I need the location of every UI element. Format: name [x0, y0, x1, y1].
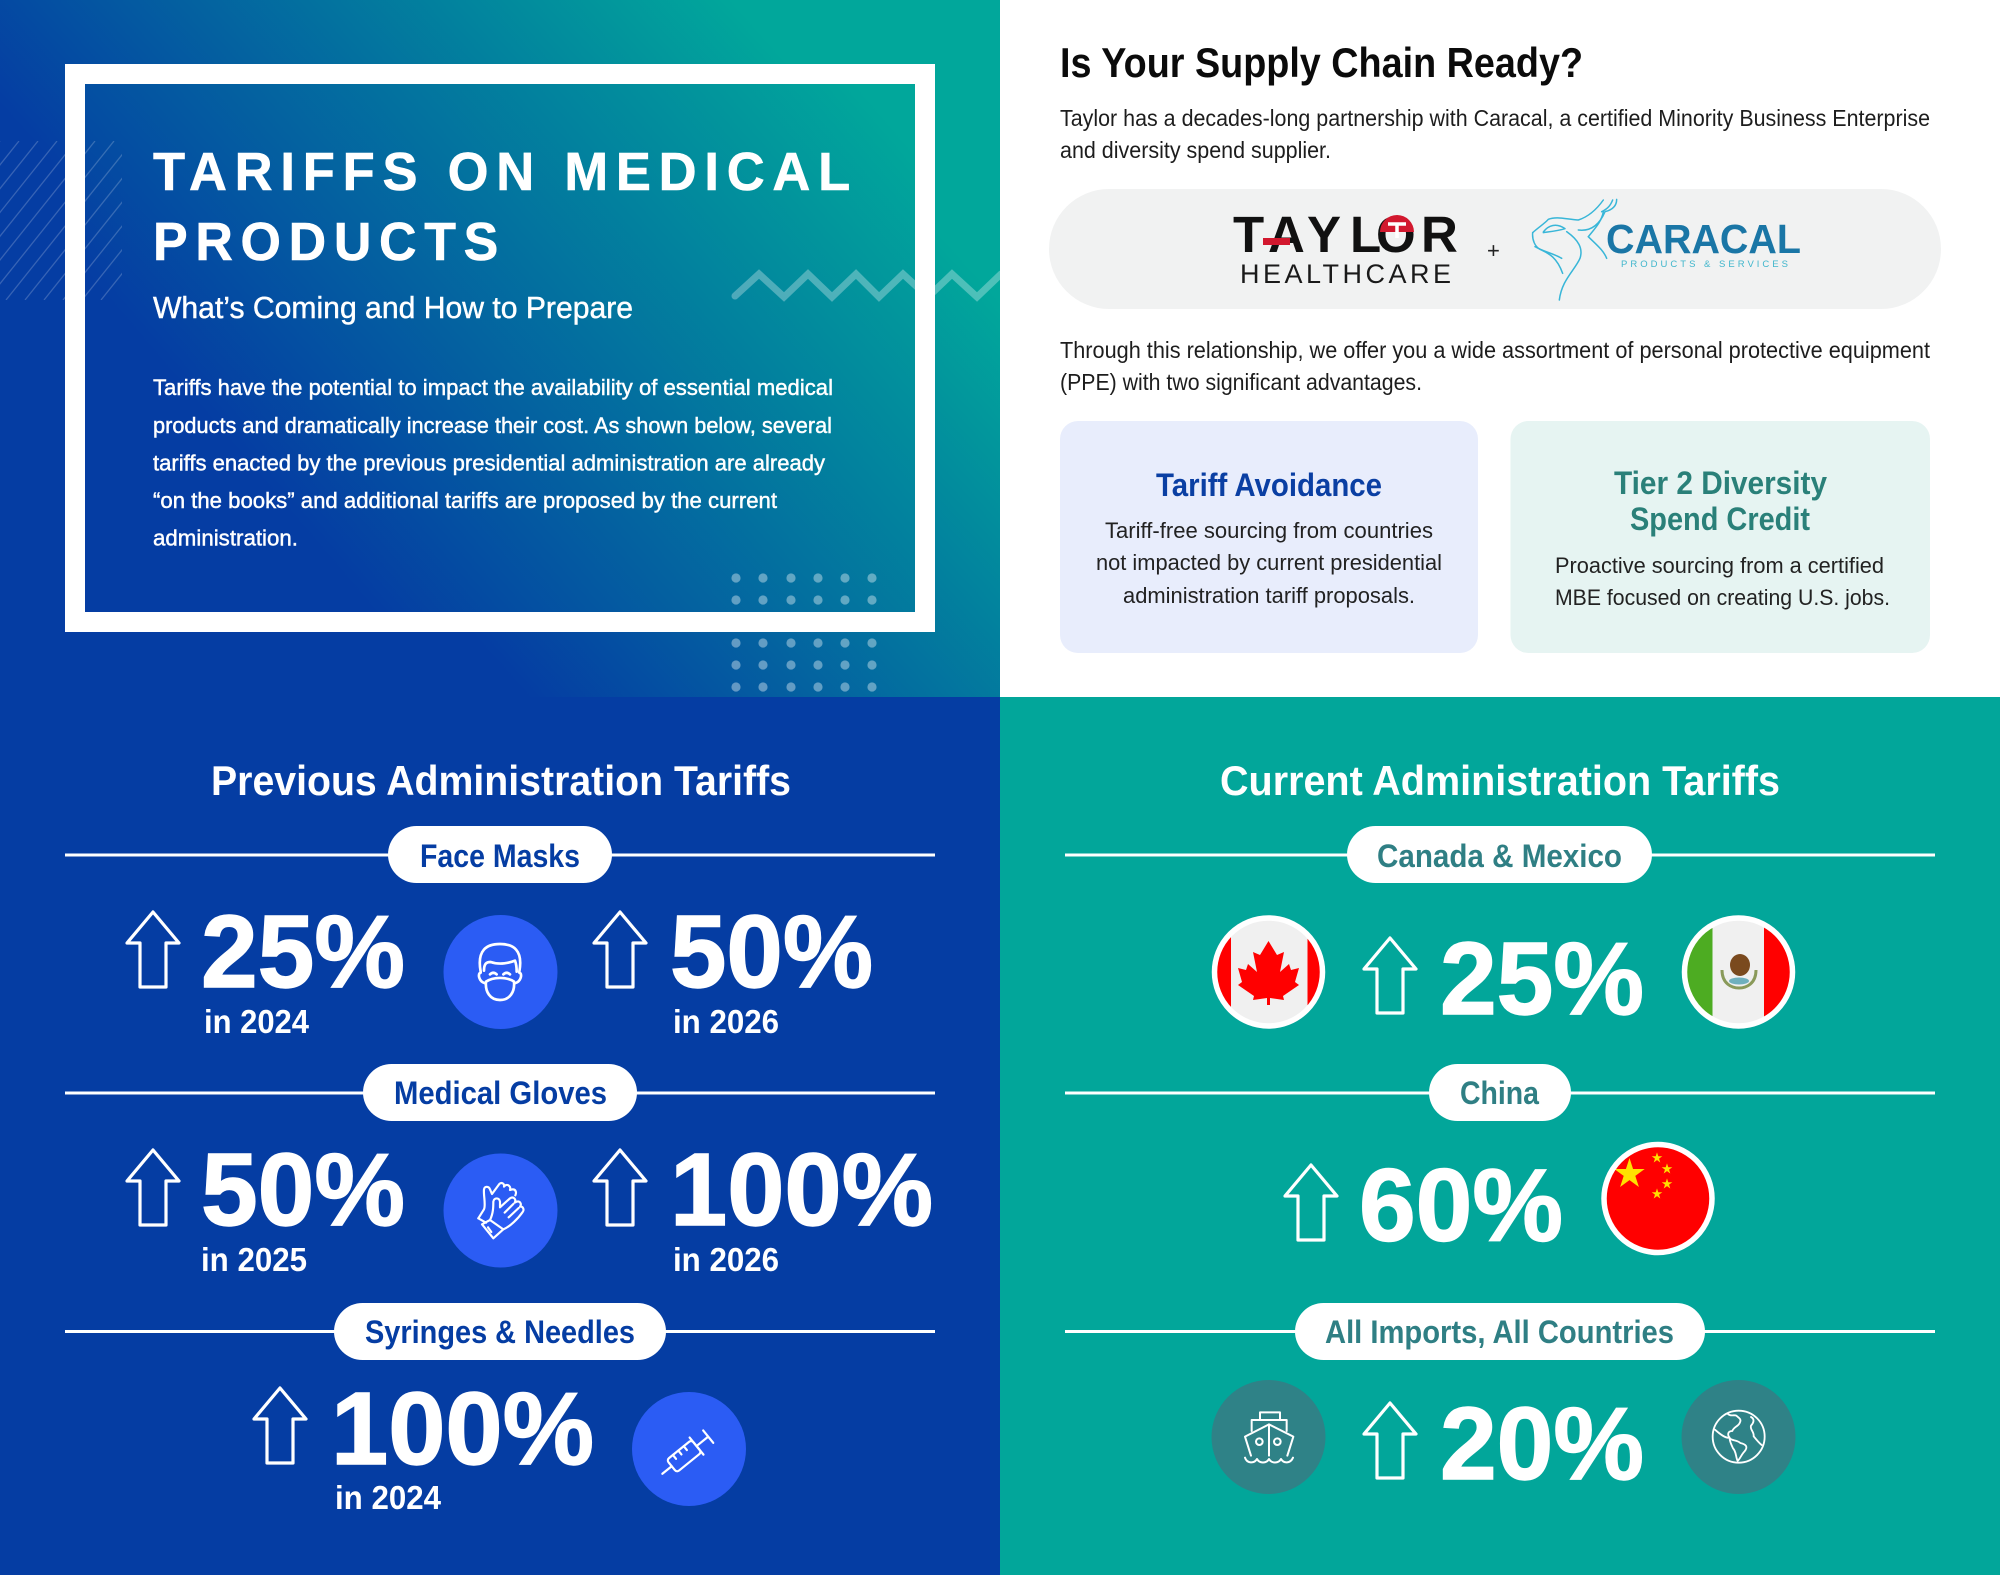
icon: canada flag	[1210, 915, 1330, 1030]
icon: face mask	[444, 915, 558, 1029]
stat 60 percent: 60%	[1359, 1148, 1563, 1262]
arrow up	[594, 1150, 646, 1225]
card: tariff avoidance: Tariff Avoidance	[1156, 467, 1382, 503]
intro paragraph: Tariffs have the potential to impact the availability of essential medical	[153, 375, 833, 400]
icon: gloves	[444, 1154, 558, 1268]
decorative hatch lines	[0, 141, 122, 300]
logo: Taylor Healthcare: TAYLOR	[1233, 206, 1458, 263]
year: in 2026	[673, 1241, 779, 1278]
icon: globe	[1682, 1380, 1796, 1494]
intro paragraph	[153, 375, 833, 550]
heading: Current Administration Tariffs	[1220, 757, 1780, 804]
intro paragraph: “on the books” and additional tariffs are proposed by the current	[153, 488, 778, 513]
arrow up	[594, 912, 646, 987]
stat 100 percent: 100%	[670, 1132, 933, 1247]
intro paragraph: tariffs enacted by the previous presidential administration are already	[153, 450, 826, 476]
arrow up	[1285, 1165, 1337, 1240]
logo: Caracal: PRODUCTS & SERVICES	[1621, 259, 1788, 270]
section: canada and mexico	[1065, 826, 1935, 1036]
card: tier 2 diversity: MBE focused on creating U.S. jobs.	[1555, 585, 1890, 610]
icon: syringe	[632, 1392, 746, 1506]
heading: Previous Administration Tariffs	[211, 757, 791, 804]
section: medical gloves: Medical Gloves	[394, 1075, 607, 1111]
section: medical gloves	[65, 1064, 935, 1278]
logo: Taylor Healthcare: HEALTHCARE	[1240, 259, 1451, 289]
arrow up	[127, 912, 179, 987]
logo pill	[1049, 189, 1941, 309]
inner gradient box	[85, 84, 915, 612]
title	[153, 142, 858, 272]
arrow up	[1364, 1403, 1416, 1478]
section: canada and mexico: Canada & Mexico	[1377, 838, 1622, 874]
section: face masks	[65, 826, 935, 1040]
intro paragraph: administration.	[153, 526, 298, 550]
stat 20 percent: 20%	[1440, 1386, 1644, 1501]
section: all imports	[1065, 1303, 1935, 1501]
year: in 2024	[204, 1003, 310, 1040]
arrow up	[254, 1388, 306, 1463]
icon: ship	[1212, 1380, 1326, 1494]
partnership text: and diversity spend supplier.	[1060, 137, 1331, 163]
section: china: China	[1460, 1075, 1539, 1111]
card: tier 2 diversity: Spend Credit	[1630, 501, 1810, 537]
section: china	[1065, 1064, 1935, 1262]
decorative zigzag	[735, 274, 1001, 297]
stat 50 percent: 50%	[670, 894, 873, 1009]
panel: supply chain readiness	[1049, 39, 1941, 653]
logo: Caracal: CARACAL	[1606, 216, 1801, 262]
card: tariff avoidance	[1060, 421, 1478, 653]
panel: white supply chain background	[1000, 0, 2000, 697]
year: in 2024	[335, 1479, 442, 1516]
relationship text: (PPE) with two significant advantages.	[1060, 369, 1422, 395]
plus sign: +	[1487, 238, 1500, 263]
year: in 2026	[673, 1003, 779, 1040]
card: tariff avoidance: administration tariff proposals.	[1123, 583, 1415, 608]
intro paragraph: products and dramatically increase their cost. As shown below, several	[153, 413, 832, 438]
subtitle: What’s Coming and How to Prepare	[153, 290, 633, 325]
panel: title hero	[0, 0, 1001, 697]
stat 25 percent: 25%	[201, 894, 405, 1009]
relationship text	[1060, 337, 1931, 395]
arrow up	[127, 1150, 179, 1225]
card: tier 2 diversity: Tier 2 Diversity	[1614, 465, 1827, 501]
stat 25 percent: 25%	[1440, 921, 1644, 1036]
white frame	[75, 74, 925, 622]
decorative dots	[731, 573, 877, 692]
panel: current administration tariffs	[1000, 697, 2000, 1575]
card: tariff avoidance: Tariff-free sourcing from countries	[1105, 518, 1433, 543]
relationship text: Through this relationship, we offer you a wide assortment of personal protective equipment	[1060, 337, 1931, 363]
title: TARIFFS ON MEDICAL	[153, 142, 858, 202]
logo: Taylor Healthcare	[1233, 206, 1458, 289]
title: PRODUCTS	[153, 212, 506, 272]
section: syringes and needles	[65, 1303, 935, 1516]
stat 100 percent: 100%	[331, 1371, 594, 1486]
arrow up	[1364, 938, 1416, 1013]
stat 50 percent: 50%	[201, 1132, 405, 1247]
partnership text: Taylor has a decades-long partnership with Caracal, a certified Minority Business Enterprise	[1060, 105, 1930, 131]
section: syringes and needles: Syringes & Needles	[365, 1314, 635, 1350]
section: face masks: Face Masks	[420, 838, 580, 874]
panel: previous administration tariffs	[0, 697, 1000, 1575]
card: tier 2 diversity	[1510, 421, 1930, 653]
section: all imports: All Imports, All Countries	[1325, 1314, 1674, 1350]
heading: Is Your Supply Chain Ready?	[1060, 39, 1583, 86]
icon: china flag	[1604, 1144, 1712, 1252]
logo: Caracal	[1533, 199, 1801, 300]
partnership text	[1060, 105, 1930, 163]
year: in 2025	[201, 1241, 307, 1278]
card: tier 2 diversity: Proactive sourcing from a certified	[1555, 553, 1884, 578]
card: tariff avoidance: not impacted by current presidential	[1096, 550, 1442, 575]
icon: mexico flag	[1680, 915, 1800, 1030]
